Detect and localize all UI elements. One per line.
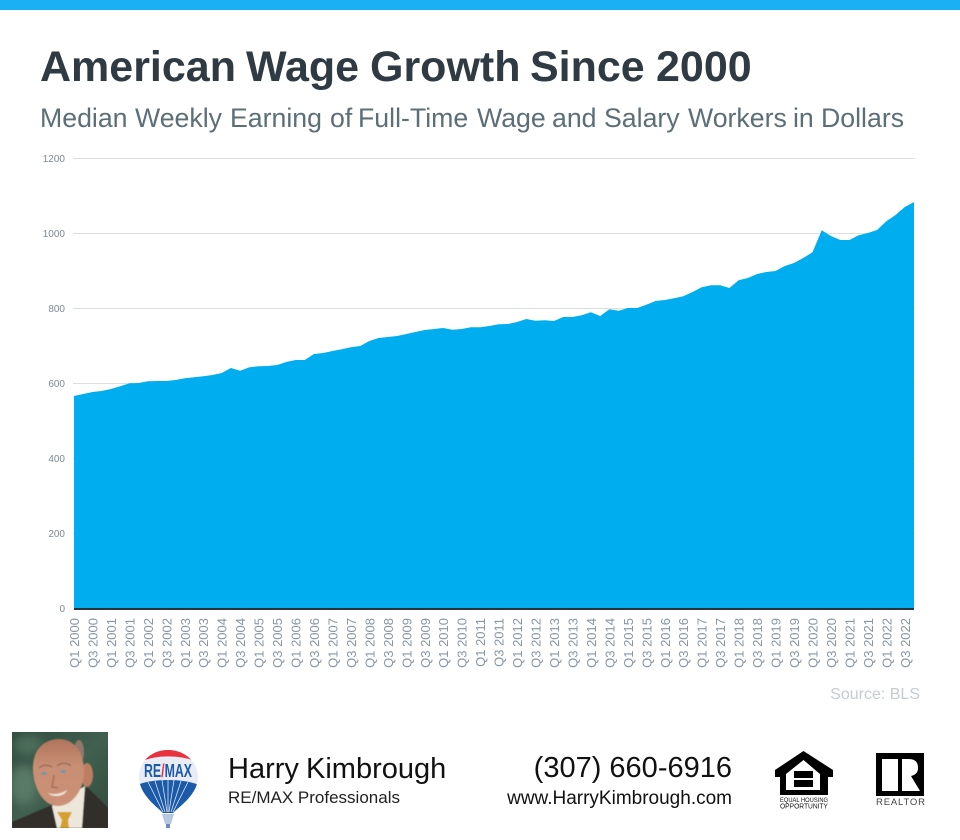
x axis labels: Q3 2010: [455, 618, 470, 668]
subtitle: of: [330, 103, 360, 133]
icon: equal housing opportunity: EQUAL HOUSING: [780, 797, 828, 804]
x axis labels: Q3 2020: [824, 618, 839, 668]
x axis labels: Q1 2010: [436, 618, 451, 668]
x axis labels: Q3 2008: [381, 618, 396, 668]
title: American: [40, 43, 248, 91]
x axis labels: Q3 2014: [602, 618, 617, 668]
icon: realtor: [876, 753, 925, 808]
top bar: [0, 0, 960, 10]
x axis labels: Q3 2006: [307, 618, 322, 668]
subtitle: Workers: [688, 103, 794, 133]
x axis labels: Q1 2007: [326, 618, 340, 668]
icon: equal housing opportunity: OPPORTUNITY: [780, 802, 828, 810]
x axis labels: Q3 2011: [492, 618, 507, 667]
x axis line: [74, 608, 914, 610]
x axis labels: Q3 2004: [233, 618, 248, 668]
x axis labels: Q3 2022: [898, 618, 913, 668]
icon: realtor: REALTOR: [876, 797, 925, 808]
y axis labels: 1000: [43, 229, 65, 240]
x axis labels: Q1 2001: [104, 618, 119, 668]
subtitle: Median: [40, 103, 135, 133]
x axis labels: Q1 2008: [362, 618, 377, 668]
title: 2000: [656, 43, 752, 91]
y axis labels: 1200: [43, 154, 65, 165]
area: median weekly earnings: [74, 202, 914, 608]
x axis labels: Q3 2001: [122, 618, 137, 668]
y axis labels: 200: [48, 529, 65, 540]
x axis labels: Q3 2017: [713, 618, 728, 668]
x axis labels: Q3 2005: [270, 618, 285, 668]
x axis labels: Q3 2016: [676, 618, 691, 668]
agent name: Harry: [228, 753, 307, 785]
agent name: Kimbrough: [306, 753, 446, 785]
x axis labels: Q1 2009: [399, 618, 414, 668]
agent photo: [10, 732, 108, 828]
x axis labels: Q1 2015: [621, 618, 636, 668]
title: Wage: [246, 43, 371, 91]
x axis labels: Q1 2005: [252, 618, 267, 668]
website: www.HarryKimbrough.com: [506, 788, 732, 809]
x axis labels: Q1 2018: [732, 618, 747, 668]
source: Source: BLS: [830, 686, 920, 703]
x axis labels: Q3 2021: [861, 618, 876, 668]
x axis labels: Q3 2015: [639, 618, 654, 668]
x axis labels: Q3 2019: [787, 618, 802, 668]
x axis labels: Q3 2000: [86, 618, 100, 668]
y axis labels: 400: [48, 454, 65, 465]
x axis labels: Q1 2019: [768, 618, 784, 668]
x axis labels: [67, 618, 913, 668]
x axis labels: Q3 2013: [566, 618, 580, 668]
subtitle: Salary: [604, 103, 687, 133]
x axis labels: Q3 2009: [418, 618, 433, 668]
x axis labels: Q3 2002: [159, 618, 174, 668]
x axis labels: Q1 2022: [879, 618, 894, 668]
y axis labels: 800: [48, 304, 65, 315]
y axis labels: [43, 154, 65, 615]
x axis labels: Q1 2017: [695, 618, 710, 668]
x axis labels: Q3 2003: [196, 618, 211, 668]
x axis labels: Q1 2012: [510, 618, 525, 668]
x axis labels: Q1 2004: [215, 618, 230, 668]
x axis labels: Q1 2020: [806, 618, 820, 668]
x axis labels: Q1 2006: [288, 618, 304, 668]
brokerage: RE/MAX Professionals: [228, 789, 400, 807]
subtitle: and: [552, 103, 604, 133]
area chart: [43, 154, 915, 668]
subtitle: Full-Time: [358, 103, 476, 133]
x axis labels: Q1 2011: [473, 618, 488, 667]
title: Since: [530, 43, 657, 91]
title: Growth: [370, 43, 532, 91]
x axis labels: Q1 2000: [67, 618, 82, 668]
x axis labels: Q1 2016: [658, 618, 673, 668]
RE/MAX balloon logo: RE/MAX: [144, 761, 192, 781]
subtitle: Dollars: [821, 103, 904, 133]
RE/MAX balloon logo: [139, 750, 198, 828]
x axis labels: Q1 2003: [178, 618, 193, 668]
subtitle: Earning: [230, 103, 329, 133]
icon: equal housing opportunity: [775, 751, 833, 810]
y axis labels: 0: [59, 604, 65, 615]
x axis labels: Q1 2021: [842, 618, 857, 668]
x axis labels: Q3 2007: [344, 618, 359, 668]
x axis labels: Q3 2018: [750, 618, 765, 668]
phone: (307) 660-6916: [534, 752, 732, 784]
x axis labels: Q3 2012: [528, 618, 544, 668]
y axis labels: 600: [48, 379, 65, 390]
subtitle: in: [793, 103, 821, 133]
x axis labels: Q1 2014: [584, 618, 599, 668]
x axis labels: Q1 2002: [141, 618, 156, 668]
y axis gridlines: [73, 158, 915, 534]
subtitle: Weekly: [135, 103, 229, 133]
x axis labels: Q1 2013: [547, 618, 562, 668]
subtitle: Wage: [477, 103, 553, 133]
